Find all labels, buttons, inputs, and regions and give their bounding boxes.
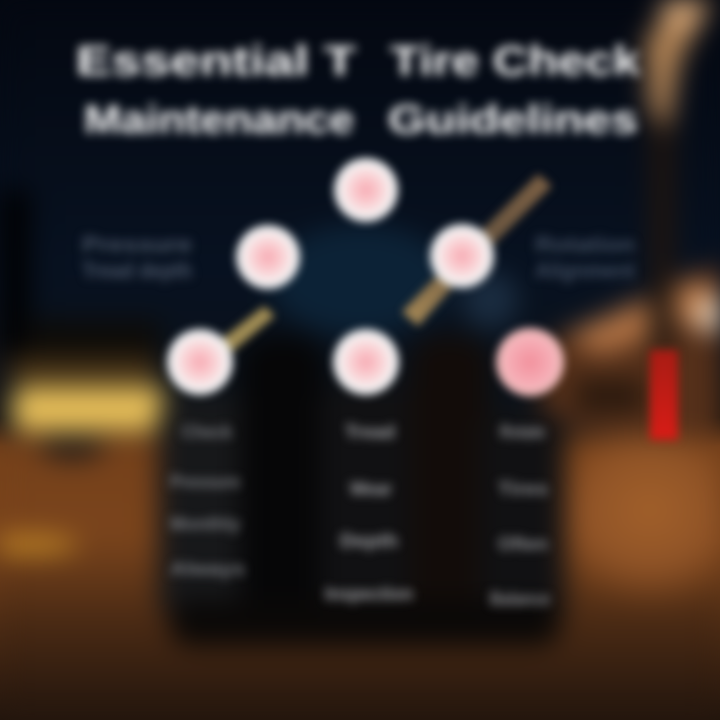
- column text left: [170, 422, 245, 579]
- node: upper right: [430, 224, 494, 288]
- column text left: Monthly: [170, 514, 240, 534]
- tire stack: [158, 335, 565, 645]
- column text right: Rotate: [500, 422, 545, 442]
- night sky: [0, 0, 720, 440]
- column text left: Pressure: [170, 472, 240, 492]
- left dark tree silhouette: [0, 190, 160, 360]
- roadside building: [540, 262, 720, 440]
- road light right: [540, 410, 720, 610]
- title line 2 right: Guidelines: [388, 98, 638, 142]
- title line 2 left: Maintenance: [84, 98, 354, 142]
- road: [0, 436, 720, 720]
- column text right: Tires: [498, 479, 548, 499]
- column text right: Balance: [490, 589, 550, 609]
- road light left: [0, 534, 78, 556]
- blue glow behind nodes: [270, 225, 518, 335]
- node: top: [334, 158, 398, 222]
- side caption right: Alignment: [535, 258, 636, 283]
- column text right: Often: [498, 534, 548, 554]
- column text centre: Depth: [340, 531, 398, 551]
- title line 1 left: Essential T: [76, 37, 356, 84]
- red post: [650, 350, 678, 440]
- column text right: [490, 422, 550, 609]
- column text centre: [325, 422, 413, 604]
- bottle neck right: [402, 174, 552, 326]
- side caption left: Pressure: [82, 232, 192, 257]
- title line 1 right: Tire Check: [390, 37, 641, 84]
- column text centre: Tread: [345, 422, 395, 442]
- node: upper left: [236, 225, 300, 289]
- node: lower right: [496, 328, 564, 396]
- side caption right: Rotation: [535, 232, 635, 257]
- node: lower centre: [333, 329, 399, 395]
- bottle neck left: [214, 306, 275, 352]
- side caption left: [82, 232, 192, 283]
- side caption right: [535, 232, 636, 283]
- column text left: Always: [170, 559, 245, 579]
- title block: [76, 37, 641, 142]
- car with yellow lights: [8, 358, 166, 461]
- column text centre: Inspection: [325, 584, 413, 604]
- street lamp: [645, 0, 712, 350]
- node: lower left: [167, 329, 233, 395]
- side caption left: Tread depth: [82, 258, 192, 283]
- column text centre: Wear: [350, 479, 392, 499]
- column text left: Check: [182, 422, 233, 442]
